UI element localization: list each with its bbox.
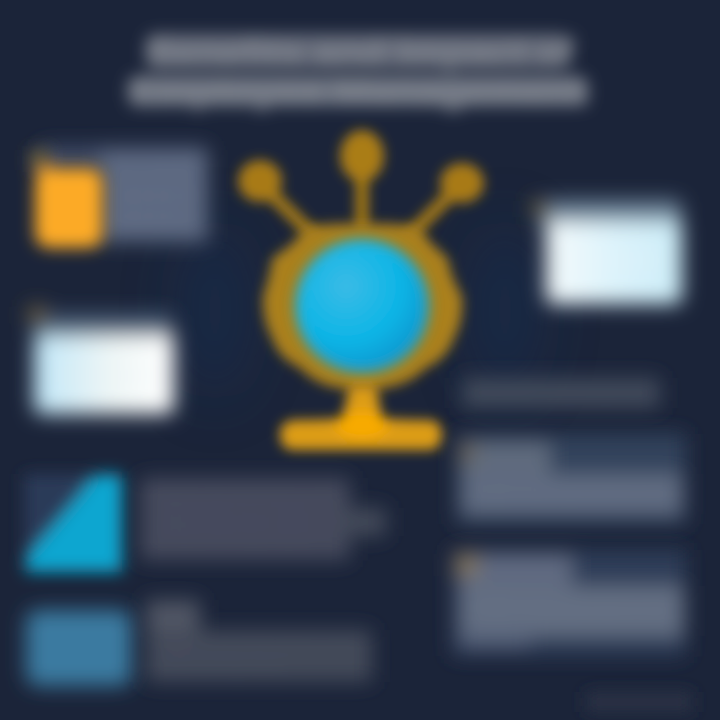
text block: bars caption: Supporting text (152, 660, 282, 675)
icon: blue tile (26, 610, 132, 686)
text block: chart caption: Supporting description text line (150, 514, 380, 529)
panel: right white card: Key benefit (566, 253, 661, 268)
text block: chart caption (140, 478, 386, 560)
text block: right heading (462, 378, 660, 408)
panel: left white card (28, 306, 174, 414)
panel: right upper card: Supporting description text (470, 486, 670, 501)
panel: right lower card (452, 550, 686, 656)
footer text (586, 692, 692, 712)
text block: top left card: Supporting text (112, 186, 200, 201)
text block: right heading: Section heading text (468, 387, 653, 402)
panel: right lower card: Supporting description text (470, 594, 670, 609)
footer text: Source (592, 698, 686, 710)
panel: bottom left bars (26, 600, 372, 686)
title (128, 31, 588, 112)
icon: globe (296, 240, 428, 372)
panel: right lower card: Supporting description text (470, 614, 670, 629)
text block: bars caption: Label (152, 612, 194, 627)
background glow: left (180, 220, 250, 400)
icon: stand (280, 385, 442, 450)
text block: chart caption: Supporting text (150, 536, 310, 551)
panel: left white card: Key benefit (58, 368, 153, 383)
text block: top left card: Key benefit (112, 160, 200, 175)
text block: bars caption: Supporting description text (152, 638, 357, 653)
text block: bars caption (146, 600, 372, 682)
icon: orange tile (30, 150, 103, 248)
background glow: right (470, 220, 540, 400)
text block: chart caption: Supporting description text (150, 488, 340, 503)
title: Benefits and Impact of (145, 31, 576, 72)
panel: right upper card (456, 434, 686, 524)
title: Employee Management (128, 71, 588, 112)
icon: gold ring (263, 224, 462, 390)
panel: bottom left rising chart (24, 474, 386, 572)
panel: top left card (30, 146, 208, 248)
panel: right upper card: Label (470, 454, 540, 469)
text block: top left card (40, 146, 208, 242)
panel: right white card (532, 200, 682, 304)
panel: right lower card: Label (480, 566, 565, 581)
chart: rising area (24, 474, 122, 572)
text block: top left card: Supporting text (112, 212, 200, 227)
icon: antennae (238, 130, 484, 240)
icon: central globe on a stand with three antennae (238, 130, 484, 450)
